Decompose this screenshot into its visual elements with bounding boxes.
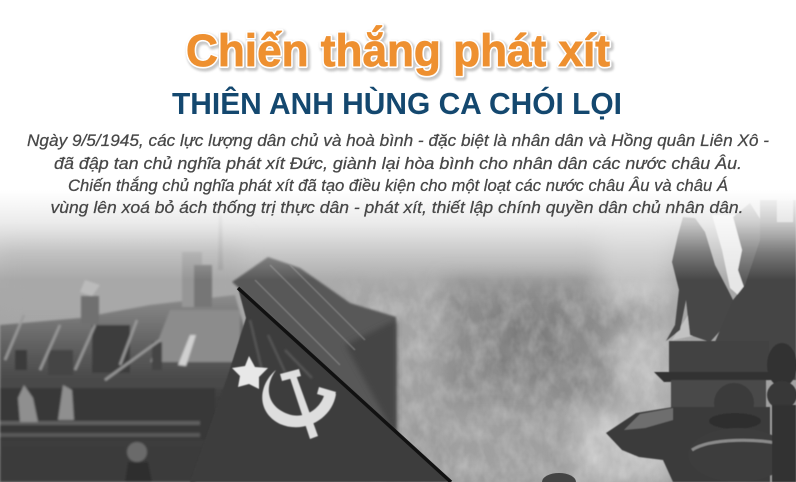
title: Chiến thắng phát xít [186,25,610,76]
title: Chiến thắng phát xít [188,27,612,78]
flag pole [238,288,451,482]
intro text block: đã đập tan chủ nghĩa phát xít Đức, giành lại hòa bình cho nhân dân các nước châu Âu. [54,154,742,173]
subtitle: THIÊN ANH HÙNG CA CHÓI LỌI [172,85,622,121]
white fade over photo top [0,190,796,280]
icon: star [232,356,268,389]
flag body [190,288,451,482]
distant roof behind flag [232,257,396,437]
pale gap between statues [712,215,748,295]
photo: Red flag over the ruins of Berlin [0,190,796,482]
intro text block: vùng lên xoá bỏ ách thống trị thực dân - phát xít, thiết lập chính quyền dân chủ nhân dân. [50,198,744,217]
intro text block [27,131,769,217]
intro text block: Chiến thắng chủ nghĩa phát xít đã tạo điều kiện cho một loạt các nước châu Âu và châu Á [68,176,728,195]
ruined buildings on the left [0,215,245,482]
icon: hammer and sickle [262,369,336,439]
dome at bottom [542,473,576,482]
intro text block: Ngày 9/5/1945, các lực lượng dân chủ và hoà bình - đặc biệt là nhân dân và Hồng quân Liên Xô - [27,131,769,150]
statues and pedestal on the right [606,200,796,482]
title: Chiến thắng phát xít [186,25,610,76]
